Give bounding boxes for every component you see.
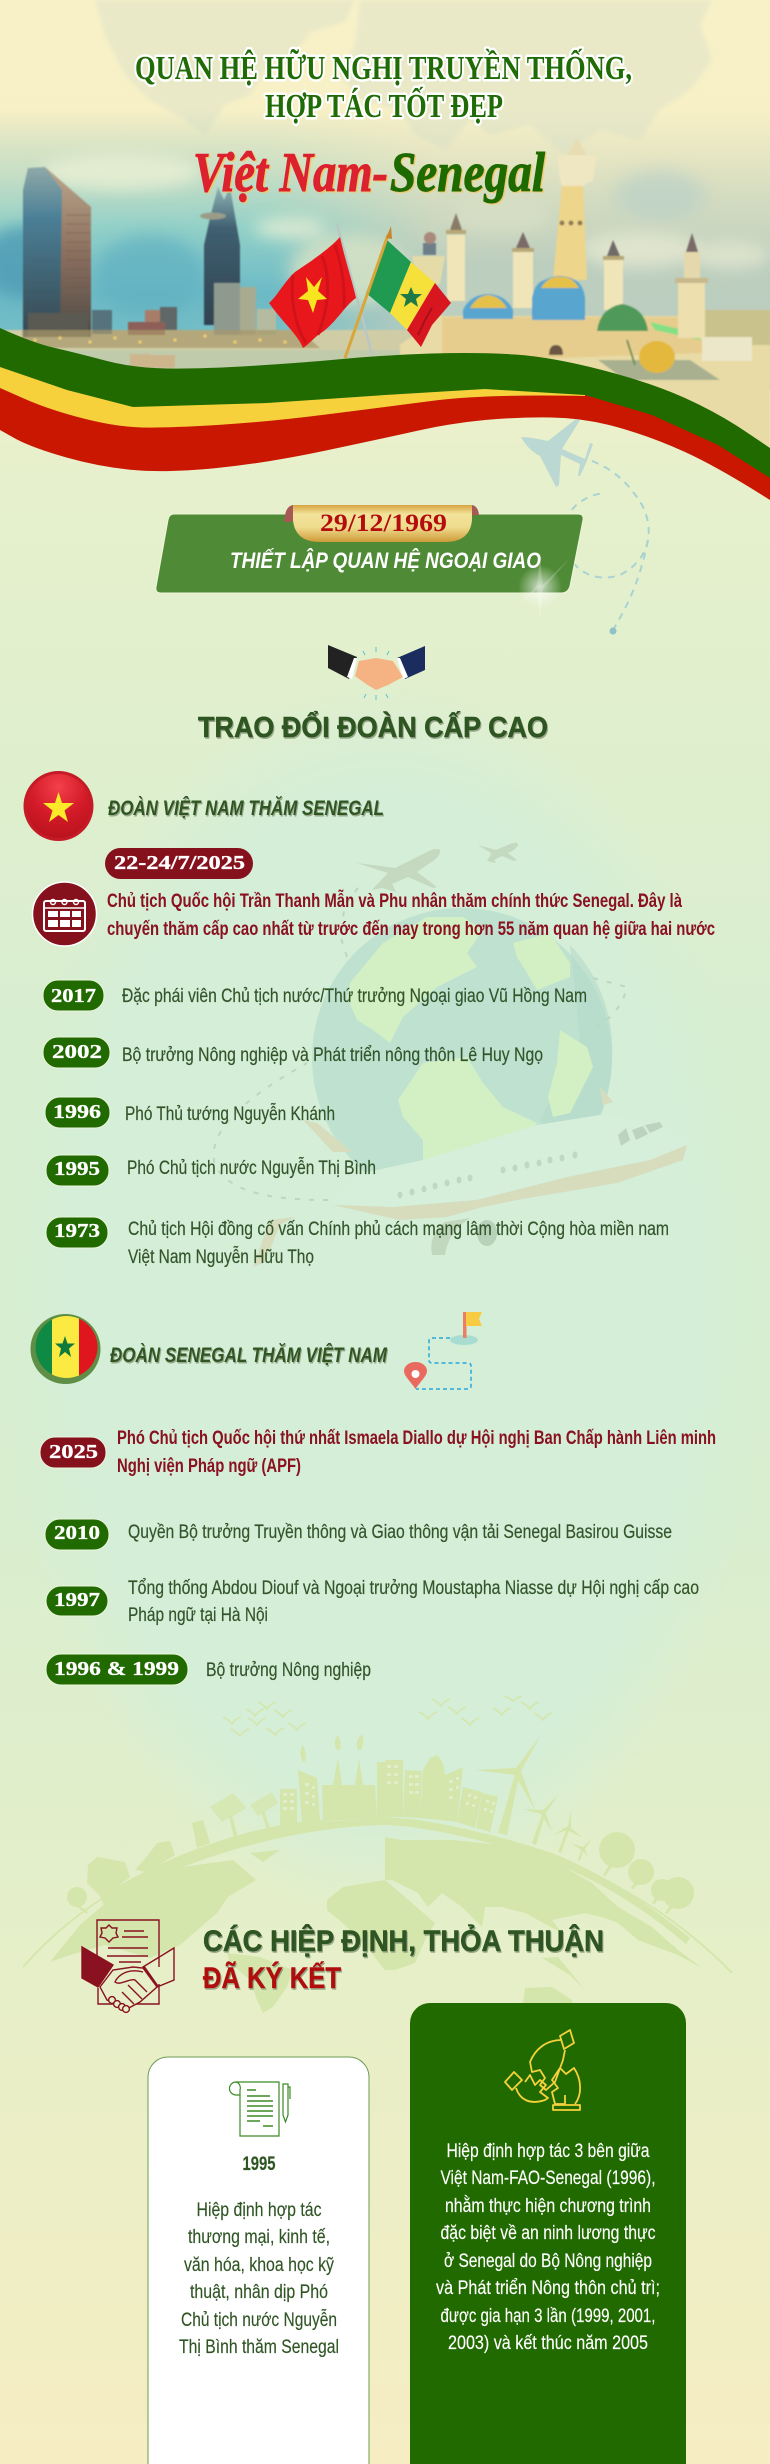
timeline row: 1973: 1973 <box>54 1220 100 1242</box>
crossed flags <box>269 224 451 358</box>
globe arc <box>23 1818 732 1973</box>
header cityscape <box>0 110 770 450</box>
timeline row: 1973: Chủ tịch Hội đồng cố vấn Chính phủ cách mạng lâm thời Cộng hòa miền nam <box>128 1219 669 1240</box>
section heading: ĐÃ KÝ KẾT <box>203 1961 341 1995</box>
banner: establishment of diplomatic relations <box>156 505 583 620</box>
heading: high-level delegation exchange: TRAO ĐỔI ĐOÀN CẤP CAO <box>198 710 548 744</box>
dashed flight path <box>214 885 627 1200</box>
continents <box>50 1860 256 1962</box>
city buildings <box>280 1789 297 1826</box>
card: 1995 agreement <box>148 2057 369 2464</box>
date pill: 22-24/7/2025 <box>114 852 245 874</box>
background illustration: globe and planes <box>214 843 687 1267</box>
flag: Senegal <box>366 240 451 347</box>
icon: airplane with dashed route <box>521 419 649 634</box>
timeline row: 1996 & 1999 <box>46 1654 371 1685</box>
timeline row: 2025 <box>40 1428 716 1477</box>
building windows <box>283 1765 495 1813</box>
banner panel <box>156 514 583 593</box>
timeline row: 1996 & 1999: Bộ trưởng Nông nghiệp <box>206 1660 371 1681</box>
flag pole: Senegal <box>345 226 392 358</box>
highlighted visit text <box>107 890 715 940</box>
ribbon band: yellow <box>0 350 585 428</box>
timeline row: 1995: Phó Chủ tịch nước Nguyễn Thị Bình <box>127 1157 376 1179</box>
world map backdrop <box>95 0 712 155</box>
card: 1995 agreement: thương mại, kinh tế, <box>188 2227 330 2248</box>
subheading: ĐOÀN VIỆT NAM THĂM SENEGAL <box>108 796 384 820</box>
card: tripartite agreement: nhằm thực hiện chương trình <box>445 2195 651 2217</box>
icon: handshake <box>328 645 425 700</box>
timeline row: 1997 <box>46 1578 699 1626</box>
card: tripartite agreement: 2003) và kết thúc năm 2005 <box>448 2333 648 2354</box>
card: 1995 agreement: Hiệp định hợp tác <box>196 2200 322 2221</box>
section: delegation from Vietnam to Senegal <box>24 771 715 1268</box>
card: 1995 agreement: Chủ tịch nước Nguyễn <box>181 2309 337 2331</box>
date pill <box>105 848 253 879</box>
icon: hands holding puzzle <box>505 2030 580 2110</box>
birds <box>223 1696 552 1736</box>
timeline row: 2002: Bộ trưởng Nông nghiệp và Phát triển nông thôn Lê Huy Ngọ <box>122 1045 543 1066</box>
flag: Vietnam <box>269 237 356 348</box>
date tab: 29/12/1969 <box>320 510 447 537</box>
timeline row: 2010: 2010 <box>54 1522 100 1544</box>
title: QUAN HỆ HỮU NGHỊ TRUYỀN THỐNG, <box>135 48 632 87</box>
small airplanes <box>357 843 518 892</box>
ribbon band: green <box>0 328 770 478</box>
card: tripartite agreement: Việt Nam-FAO-Senegal (1996), <box>440 2168 656 2189</box>
flag pole: Vietnam <box>337 224 373 358</box>
large airplane <box>253 1087 687 1267</box>
timeline row: 1973 <box>46 1217 669 1268</box>
sky <box>0 110 770 390</box>
timeline row: 1997: Pháp ngữ tại Hà Nội <box>128 1605 268 1626</box>
timeline row: 2017 <box>43 980 587 1011</box>
subheading: ĐOÀN SENEGAL THĂM VIỆT NAM <box>110 1343 387 1367</box>
timeline row: 2002: 2002 <box>52 1041 102 1063</box>
icon: contract with handshake <box>82 1920 174 2012</box>
icon: Senegal flag medallion <box>30 1314 100 1385</box>
card: tripartite agreement: đặc biệt về an ninh lương thực <box>440 2223 656 2244</box>
timeline row: 2017: Đặc phái viên Chủ tịch nước/Thứ trưởng Ngoại giao Vũ Hồng Nam <box>122 986 587 1007</box>
timeline row: 1996 <box>45 1097 335 1128</box>
timeline row: 1996: 1996 <box>53 1101 101 1123</box>
section: delegation from Senegal to Vietnam <box>30 1312 716 1685</box>
icon: calendar <box>32 882 96 946</box>
section heading: CÁC HIỆP ĐỊNH, THỎA THUẬN <box>203 1924 604 1958</box>
section: signed agreements <box>82 1920 686 2464</box>
banner text: THIẾT LẬP QUAN HỆ NGOẠI GIAO <box>230 548 541 573</box>
subtitle: Việt Nam-Senegal <box>193 142 545 204</box>
card: 1995 agreement: Thị Bình thăm Senegal <box>179 2337 339 2358</box>
card: tripartite agreement: được gia hạn 3 lần (1999, 2001, <box>440 2306 656 2327</box>
ribbon band: red <box>0 350 770 500</box>
title <box>135 48 632 125</box>
timeline row: 1996 & 1999: 1996 & 1999 <box>54 1658 179 1680</box>
card: tripartite agreement: ở Senegal do Bộ Nông nghiệp <box>444 2251 652 2272</box>
ribbon: green, yellow, red <box>0 328 770 500</box>
subtitle: Việt Nam-Senegal: Việt Nam- <box>193 142 388 204</box>
timeline row: 2002 <box>43 1037 543 1068</box>
timeline row: 2010: Quyền Bộ trưởng Truyền thông và Giao thông vận tải Senegal Basirou Guisse <box>128 1522 672 1543</box>
title: HỢP TÁC TỐT ĐẸP <box>265 86 503 125</box>
skyline: Ho Chi Minh City <box>0 167 410 376</box>
globe <box>312 908 612 1208</box>
wind turbines <box>475 1735 592 1861</box>
icon: document and pen <box>230 2082 290 2136</box>
card: 1995 agreement: văn hóa, khoa học kỹ <box>184 2255 334 2276</box>
date tab <box>284 505 479 542</box>
timeline row: 1995: 1995 <box>54 1158 100 1180</box>
timeline row: 2025: 2025 <box>49 1441 98 1463</box>
factory smoke <box>300 1734 363 1762</box>
card: 1995 agreement: 1995 <box>242 2154 276 2175</box>
card: tripartite agreement: Hiệp định hợp tác 3 bên giữa <box>446 2141 650 2162</box>
icon: route with flag and map pin <box>404 1312 482 1389</box>
trees <box>67 1832 694 1914</box>
timeline row: 2025: Nghị viện Pháp ngữ (APF) <box>117 1456 301 1477</box>
subtitle: Việt Nam-Senegal: Senegal <box>390 142 545 204</box>
timeline row: 1973: Việt Nam Nguyễn Hữu Thọ <box>128 1246 314 1268</box>
card: tripartite agreement: và Phát triển Nông thôn chủ trì; <box>436 2278 660 2299</box>
timeline row: 1997: 1997 <box>54 1589 100 1611</box>
timeline row: 2010 <box>45 1519 672 1550</box>
timeline row: 1995 <box>46 1155 376 1186</box>
card: tripartite agreement <box>410 2003 686 2464</box>
section heading <box>203 1924 604 1995</box>
Touba mosque <box>400 138 770 450</box>
timeline row: 1996: Phó Thủ tướng Nguyễn Khánh <box>125 1103 335 1125</box>
background illustration: green earth with city <box>23 1696 732 2013</box>
car and house <box>135 1841 175 1872</box>
solar panels and charger <box>192 1792 278 1848</box>
timeline row: 2017: 2017 <box>51 985 96 1007</box>
card: 1995 agreement: thuật, nhân dịp Phó <box>190 2282 328 2303</box>
icon: Vietnam flag medallion <box>24 771 94 841</box>
